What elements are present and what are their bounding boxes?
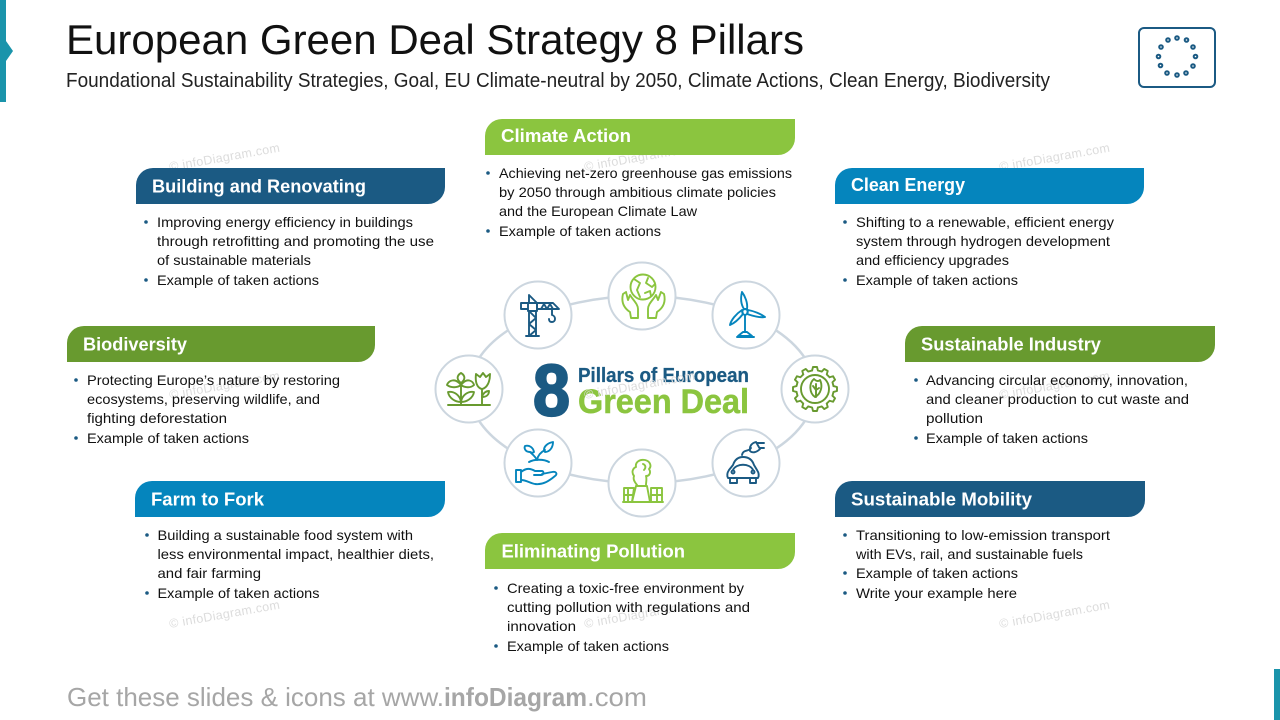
center heading: 8 Pillars of European Green Deal: Green Deal <box>578 383 749 421</box>
panel: Climate Action: by 2050 through ambitious climate policies <box>499 184 776 200</box>
panel: Sustainable Mobility <box>835 481 1145 601</box>
footer link: .com <box>587 682 647 712</box>
panel: Farm to Fork: and fair farming <box>158 565 261 581</box>
panel: Eliminating Pollution: innovation <box>507 618 576 634</box>
panel: Sustainable Industry: Sustainable Industry <box>921 334 1102 354</box>
icon: hand holding sprout <box>516 442 556 484</box>
center heading: 8 Pillars of European Green Deal <box>533 352 749 432</box>
panel: Sustainable Industry: pollution <box>926 410 983 426</box>
panel: Eliminating Pollution: Example of taken actions <box>507 638 669 654</box>
panel: Biodiversity: Example of taken actions <box>87 430 249 446</box>
center watermark: © infoDiagram.com <box>583 369 696 402</box>
icon: factory with smoke <box>623 460 663 502</box>
panel: Sustainable Mobility: Write your example here <box>856 585 1017 601</box>
panel: Sustainable Industry: Example of taken actions <box>926 430 1088 446</box>
panel: Sustainable Industry <box>905 326 1215 446</box>
panel: Biodiversity: fighting deforestation <box>87 410 227 426</box>
panel: Clean Energy: Clean Energy <box>851 174 966 195</box>
center heading: 8 Pillars of European Green Deal: Pillars of European <box>578 364 749 387</box>
panel: Clean Energy: Example of taken actions <box>856 272 1018 288</box>
panel: Sustainable Mobility: Transitioning to low-emission transport <box>856 527 1110 543</box>
panel: Climate Action: Example of taken actions <box>499 223 661 239</box>
watermarks: © infoDiagram.com <box>998 598 1111 631</box>
icon: wind turbine <box>730 292 765 337</box>
icon: EU flag <box>1139 28 1215 87</box>
panel: Clean Energy <box>835 168 1144 288</box>
footer link: infoDiagram <box>444 682 587 712</box>
watermarks: © infoDiagram.com <box>998 141 1111 174</box>
watermarks: © infoDiagram.com <box>583 598 696 631</box>
panel: Building and Renovating: through retrofitting and promoting the use <box>157 233 434 249</box>
panel: Eliminating Pollution <box>485 533 795 654</box>
watermarks: © infoDiagram.com <box>583 141 696 174</box>
icon: globe in hands <box>622 274 665 318</box>
footer link: Get these slides & icons at www. <box>67 682 444 712</box>
panel: Biodiversity: Protecting Europe’s nature by restoring <box>87 372 340 388</box>
diagram: 8 pillars ring <box>436 262 848 516</box>
panel: Farm to Fork: less environmental impact, healthier diets, <box>158 546 434 562</box>
panel: Sustainable Industry: Advancing circular economy, innovation, <box>926 372 1188 388</box>
left accent tab <box>0 0 13 102</box>
panel: Sustainable Mobility: Sustainable Mobility <box>851 488 1033 510</box>
panel: Clean Energy: and efficiency upgrades <box>856 252 1009 268</box>
panel: Biodiversity: Biodiversity <box>83 334 188 354</box>
watermarks <box>168 141 1111 631</box>
subtitle: Foundational Sustainability Strategies, Goal, EU Climate-neutral by 2050, Climate Actions, Clean Energy, Biodiversity <box>66 70 1050 92</box>
panel: Building and Renovating: Improving energy efficiency in buildings <box>157 214 413 230</box>
panel: Climate Action: and the European Climate Law <box>499 203 698 219</box>
panel: Farm to Fork: Farm to Fork <box>151 488 265 510</box>
panel: Farm to Fork: Building a sustainable food system with <box>158 527 413 543</box>
panel: Sustainable Industry: and cleaner production to cut waste and <box>926 391 1189 407</box>
panel: Eliminating Pollution: Eliminating Pollution <box>502 540 685 562</box>
panel: Clean Energy: system through hydrogen development <box>856 233 1110 249</box>
watermarks: © infoDiagram.com <box>998 369 1111 402</box>
panel: Farm to Fork <box>135 481 445 601</box>
panel: Sustainable Mobility: with EVs, rail, and sustainable fuels <box>855 546 1083 562</box>
icon: plants and tulip <box>447 373 490 405</box>
bottom right accent bar <box>1274 669 1280 720</box>
icon: electric car <box>727 442 764 483</box>
watermarks: © infoDiagram.com <box>168 141 281 174</box>
panel: Building and Renovating: of sustainable materials <box>157 252 311 268</box>
footer link <box>67 682 647 712</box>
panel: Building and Renovating: Example of taken actions <box>157 272 319 288</box>
panel: Building and Renovating <box>136 168 445 288</box>
watermarks: © infoDiagram.com <box>168 598 281 631</box>
icon: crane <box>521 295 559 336</box>
panel: Climate Action: Achieving net-zero greenhouse gas emissions <box>499 165 792 181</box>
panel: Climate Action: Climate Action <box>501 125 631 146</box>
panel: Eliminating Pollution: cutting pollution with regulations and <box>507 599 750 615</box>
panel: Biodiversity <box>67 326 375 446</box>
watermarks: © infoDiagram.com <box>168 369 281 402</box>
panel: Clean Energy: Shifting to a renewable, efficient energy <box>856 214 1114 230</box>
center heading: 8 Pillars of European Green Deal: 8 <box>533 352 570 432</box>
panel: Biodiversity: ecosystems, preserving wildlife, and <box>87 391 320 407</box>
panel: Eliminating Pollution: Creating a toxic-free environment by <box>507 580 744 596</box>
panel: Climate Action <box>485 119 795 239</box>
panel: Sustainable Mobility: Example of taken actions <box>856 565 1018 581</box>
panel: Farm to Fork: Example of taken actions <box>158 585 320 601</box>
panel: Building and Renovating: Building and Renovating <box>152 176 366 196</box>
icon: gear with leaf <box>793 367 837 411</box>
title: European Green Deal Strategy 8 Pillars <box>66 16 804 63</box>
